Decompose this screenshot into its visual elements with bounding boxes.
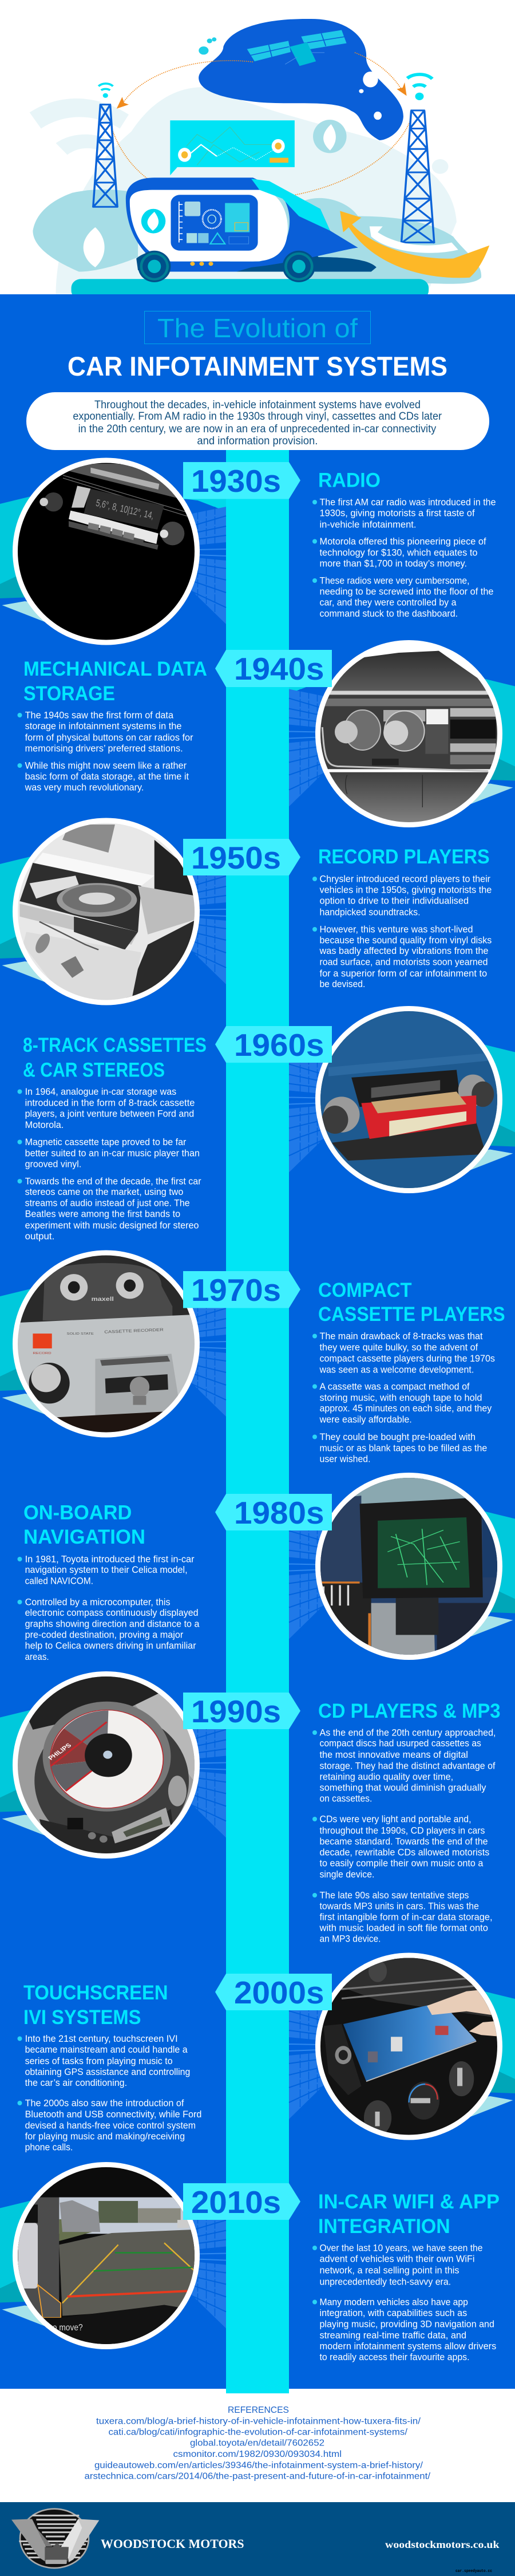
- references: guideautoweb.com/en/articles/39346/the-infotainment-system-a-brief-history/: [94, 2461, 423, 2470]
- heading: touchscreen IVI systems: [23, 1982, 168, 2029]
- year tab: 1930s: 1930s: [191, 463, 281, 499]
- text: 1970s bullets: approx. 45 minutes on each side, and they: [319, 1403, 492, 1414]
- heading: compact cassette players: [318, 1279, 505, 1326]
- heading: in-car WiFi & app integration: INTEGRATION: [318, 2215, 450, 2238]
- photo: 1970s cassette recorder: REW: [106, 1396, 118, 1401]
- intro pill: exponentially. From AM radio in the 1930s through vinyl, cassettes and CDs later: [73, 411, 442, 423]
- text: 1960s bullets: output.: [25, 1231, 54, 1241]
- text: 1950s bullets: for a superior form of car infotainment to: [319, 968, 487, 979]
- text: 1990s bullets: the most innovative means of digital: [319, 1749, 468, 1760]
- text: 1970s bullets: The main drawback of 8-tracks was that: [319, 1331, 483, 1342]
- photo: 2000s touchscreen: [315, 1952, 502, 2140]
- heading: CD players & MP3: CD PLAYERS & MP3: [318, 1700, 501, 1722]
- text: 2010s bullets: advent of vehicles with their own WiFi: [319, 2254, 475, 2264]
- heading: touchscreen IVI systems: IVI SYSTEMS: [23, 2006, 141, 2029]
- panel: 1990s CD players: [0, 1666, 501, 1944]
- heading: 8-track cassettes: 8-TRACK CASSETTES: [23, 1034, 207, 1056]
- text: radio bullets: command stuck to the dashboard.: [319, 608, 458, 619]
- text: radio bullets: needing to be screwed into the floor of the: [319, 586, 493, 597]
- year tab: 2010s: 2010s: [191, 2184, 281, 2220]
- icon: leaf left: [84, 227, 105, 267]
- text: 1980s bullets: navigation system to their Celica model,: [25, 1564, 188, 1575]
- text: 1980s bullets: Controlled by a microcomputer, this: [25, 1596, 171, 1608]
- car touchscreen: [171, 195, 258, 251]
- text: 1980s bullets: In 1981, Toyota introduced the first in-car: [25, 1554, 195, 1564]
- text: 1990s bullets: As the end of the 20th century approached,: [319, 1727, 496, 1738]
- panel: 1980s on-board navigation: [17, 1473, 515, 1660]
- photo: 1970s cassette recorder: maxell: [92, 1296, 114, 1303]
- year tab: 1960s: 1960s: [234, 1027, 324, 1063]
- heading: radio: RADIO: [318, 470, 381, 491]
- text: 1960s bullets: Magnetic cassette tape proved to be far: [25, 1137, 187, 1147]
- photo: 1970s cassette recorder: [13, 1250, 200, 1437]
- text: 1980s bullets: graphs showing direction and distance to a: [25, 1618, 200, 1630]
- photo: 1930s radio: 5,6°, 8, 10|12°, 14,: [95, 497, 155, 521]
- text: 1990s bullets: compact discs had usurped cassettes as: [319, 1738, 481, 1749]
- text: 2000s bullets: obtaining GPS assistance and controlling: [25, 2066, 190, 2077]
- brand name: WOODSTOCK MOTORS: [101, 2536, 244, 2551]
- text: 1980s bullets: areas.: [25, 1651, 49, 1662]
- panel: 1950s record players: [0, 812, 492, 1016]
- text: 2010s bullets: Many modern vehicles also have app: [319, 2297, 468, 2307]
- text: radio bullets: more than $1,700 in today’s money.: [319, 558, 467, 569]
- text: 2000s bullets: series of tasks from playing music to: [25, 2056, 173, 2066]
- panel: 2010s WiFi and app integration: [0, 2157, 500, 2362]
- references: [85, 2405, 431, 2482]
- pale background blob: [30, 87, 457, 294]
- heading: mechanical data storage: STORAGE: [23, 683, 115, 705]
- central timeline strip: [226, 441, 289, 2393]
- small watermark: car.speedyauto.cc: [455, 2569, 492, 2574]
- text: 1970s bullets: was seen as a welcome development.: [319, 1364, 474, 1375]
- text: 2010s bullets: to readily access their favourite apps.: [319, 2352, 469, 2362]
- panel: 1940s mechanical data storage: [17, 636, 515, 830]
- text: 1980s bullets: electronic compass continuously displayed: [25, 1607, 199, 1618]
- text: 1950s bullets: was badly affected by vibrations from the: [319, 945, 489, 956]
- photo: 1990s CD player: PHILIPS: [47, 1742, 73, 1761]
- text: 1940s bullets: basic form of data storage, at the time it: [25, 771, 189, 782]
- text: 1960s bullets: [17, 1086, 201, 1241]
- light teal blobs: [33, 190, 481, 284]
- text: 1970s bullets: they were quite bulky, so the advent of: [319, 1342, 478, 1352]
- text: 1990s bullets: first intangible form of in-car data storage,: [319, 1911, 492, 1923]
- text: 1970s bullets: They could be bought pre-loaded with: [319, 1431, 476, 1442]
- text: 1990s bullets: an MP3 device.: [319, 1933, 381, 1944]
- text: 1960s bullets: players, a joint venture between Ford and: [25, 1108, 194, 1119]
- car leaf badge: [141, 209, 165, 234]
- intro pill: in the 20th century, we are now in an era of unprecedented in-car connectivity: [78, 423, 437, 435]
- text: 1970s bullets: user wished.: [319, 1453, 371, 1465]
- photo: 1950s record player: [13, 818, 200, 1005]
- text: 1970s bullets: [312, 1331, 495, 1465]
- year tab: 2000s: 2000s: [234, 1975, 324, 2010]
- text: 2010s bullets: Over the last 10 years, we have seen the: [319, 2242, 483, 2254]
- text: radio bullets: car, and they were controlled by a: [319, 597, 457, 608]
- heading: on-board navigation: [23, 1502, 145, 1548]
- text: 1960s bullets: Motorola.: [25, 1119, 64, 1130]
- year tab: 1980s: 1980s: [234, 1495, 324, 1530]
- text: 2000s bullets: for playing music and making/receiving: [25, 2131, 185, 2141]
- text: 2000s bullets: [17, 2033, 201, 2153]
- text: 1990s bullets: decade, rewritable CDs allowed motorists: [319, 1847, 489, 1857]
- year tab: 1940s: 1940s: [234, 651, 324, 687]
- text: 1990s bullets: throughout the 1990s, CD players in cars: [319, 1825, 485, 1836]
- photo: 1980s navigation screen: [315, 1473, 502, 1660]
- panel: 1960s 8-track: [17, 1003, 515, 1241]
- text: 1950s bullets: Chrysler introduced record players to their: [319, 874, 490, 884]
- text: 1960s bullets: Beatles were among the first bands to: [25, 1208, 180, 1220]
- photo: 1970s cassette recorder: PLAY: [130, 1408, 144, 1413]
- text: 1960s bullets: stereos came on the market, using two: [25, 1186, 183, 1197]
- text: 2000s bullets: phone calls.: [25, 2141, 73, 2153]
- icon: satellite: [247, 30, 347, 66]
- text: 1950s bullets: [312, 874, 492, 989]
- heading: compact cassette players: COMPACT: [318, 1279, 412, 1301]
- photo: 2010s parking camera: [13, 2162, 200, 2349]
- text: 1960s bullets: In 1964, analogue in-car storage was: [25, 1086, 176, 1097]
- text: 2000s bullets: the car’s air conditioning.: [25, 2077, 127, 2088]
- text: 1960s bullets: streams of audio instead of just one. The: [25, 1198, 190, 1208]
- chart speech bubble: [170, 120, 295, 175]
- text: 1990s bullets: something that would diminish gradually: [319, 1782, 486, 1793]
- tower left: [93, 84, 118, 207]
- tower right: [401, 74, 435, 243]
- photo: 1970s cassette recorder: CASSETTE RECORDER: [104, 1327, 164, 1334]
- text: 1970s bullets: music or as blank tapes to be filled as the: [319, 1443, 487, 1453]
- text: 2000s bullets: Into the 21st century, touchscreen IVI: [25, 2033, 178, 2044]
- heading: 8-track cassettes: [23, 1034, 207, 1081]
- hero illustration: connected car: [30, 19, 489, 299]
- heading: mechanical data storage: [23, 658, 207, 705]
- text: 1970s bullets: storing music, with enough tape to hold: [319, 1392, 482, 1403]
- text: 1990s bullets: [312, 1727, 496, 1944]
- text: 1970s bullets: were easily affordable.: [319, 1414, 412, 1425]
- intro pill: and information provision.: [197, 435, 318, 447]
- text: 2010s bullets: network, a real selling point in this: [319, 2265, 459, 2275]
- text: 1980s bullets: called NAVICOM.: [25, 1576, 93, 1586]
- text: 1950s bullets: option to drive to their individualised: [319, 896, 469, 906]
- text: 2010s bullets: streaming real-time traffic data, and: [319, 2330, 466, 2341]
- text: 1940s bullets: was very much revolutionary.: [25, 782, 144, 792]
- text: radio bullets: The first AM car radio was introduced in the: [319, 497, 496, 507]
- icon: leaf badge: [313, 120, 347, 153]
- text: 1960s bullets: Towards the end of the decade, the first car: [25, 1176, 201, 1186]
- text: 1960s bullets: better suited to an in-car music player than: [25, 1147, 200, 1159]
- text: 1940s bullets: While this might now seem like a rather: [25, 760, 187, 771]
- text: 1960s bullets: grooved vinyl.: [25, 1159, 81, 1169]
- text: 1990s bullets: retaining audio quality over time,: [319, 1772, 453, 1782]
- references: csmonitor.com/1982/0930/093034.html: [173, 2449, 342, 2459]
- title: CAR INFOTAINMENT SYSTEMS: [68, 351, 447, 381]
- references: REFERENCES: [228, 2405, 289, 2415]
- text: 1950s bullets: vehicles in the 1950s, giving motorists the: [319, 884, 492, 896]
- photo: 1970s cassette recorder: FWD: [156, 1392, 168, 1397]
- text: 1940s bullets: The 1940s saw the first form of data: [25, 710, 174, 720]
- text: 1990s bullets: single device.: [319, 1869, 374, 1880]
- text: 1990s bullets: on cassettes.: [319, 1793, 372, 1804]
- text: 1990s bullets: to easily compile their own music onto a: [319, 1857, 484, 1869]
- year tab: 1950s: 1950s: [191, 840, 281, 875]
- intro pill: Throughout the decades, in-vehicle infotainment systems have evolved: [94, 399, 421, 411]
- references: arstechnica.com/cars/2014/06/the-past-present-and-future-of-in-car-infotainment/: [85, 2471, 431, 2482]
- road: [72, 279, 429, 299]
- heading: mechanical data storage: MECHANICAL DATA: [23, 658, 207, 680]
- heading: on-board navigation: ON-BOARD: [23, 1502, 132, 1524]
- intro pill: [26, 392, 489, 450]
- car: [126, 177, 377, 282]
- references: cati.ca/blog/cati/infographic-the-evolution-of-car-infotainment-systems/: [109, 2428, 408, 2437]
- text: 1970s bullets: compact cassette players during the 1970s: [319, 1353, 495, 1364]
- references: global.toyota/en/detail/7602652: [190, 2438, 324, 2448]
- yellow motion arrow: [340, 211, 489, 278]
- text: 1990s bullets: towards MP3 units in cars. This was the: [319, 1901, 479, 1911]
- text: radio bullets: 1930s, giving motorists a first taste of: [319, 507, 475, 519]
- heading: 8-track cassettes: & CAR STEREOS: [23, 1059, 165, 1081]
- text: 1980s bullets: [17, 1554, 200, 1662]
- text: 2010s bullets: integration, with capabilities such as: [319, 2307, 467, 2318]
- footer band: [0, 2502, 515, 2576]
- photo: 1990s CD player: [13, 1671, 200, 1859]
- photo: 1960s 8-track player: [315, 1006, 502, 1193]
- photo: 1940s chrome radio: [315, 640, 502, 827]
- photo: 1970s cassette recorder: RECORD: [33, 1351, 52, 1355]
- heading: in-car WiFi & app integration: IN-CAR WIFI & APP: [318, 2191, 500, 2213]
- text: radio bullets: technology for $130, which equates to: [319, 547, 477, 558]
- photo: 1970s cassette recorder: STOP: [126, 1368, 141, 1372]
- logo: Woodstock Motors emblem: [11, 2509, 99, 2568]
- panel: 2000s touchscreen IVI: [17, 1931, 515, 2153]
- text: radio bullets: Motorola offered this pioneering piece of: [319, 536, 486, 547]
- photo: 1970s cassette recorder: SOLID STATE: [67, 1332, 94, 1336]
- text: 1950s bullets: However, this venture was short-lived: [319, 924, 473, 934]
- text: radio bullets: These radios were very cumbersome,: [319, 575, 469, 586]
- year tab: 1970s: 1970s: [191, 1272, 281, 1308]
- text: 1990s bullets: with music loaded in soft file format onto: [319, 1923, 488, 1933]
- panel: 1970s compact cassette: [0, 1245, 505, 1465]
- text: 1980s bullets: help to Celica owners driving in unfamiliar: [25, 1640, 196, 1651]
- photo: 2010s parking camera: o move?: [53, 2323, 83, 2333]
- text: 1990s bullets: The late 90s also saw tentative steps: [319, 1889, 469, 1901]
- text: 1990s bullets: storage. They had the distinct advantage of: [319, 1760, 496, 1772]
- white motion arrow: [370, 226, 458, 253]
- heading: in-car WiFi & app integration: [318, 2191, 500, 2238]
- text: 1960s bullets: introduced in the form of 8-track cassette: [25, 1097, 195, 1108]
- text: 1950s bullets: road surface, and motorists soon yearned: [319, 956, 488, 968]
- orange dotted signal arcs: [110, 53, 411, 204]
- text: 2010s bullets: modern infotainment systems allow drivers: [319, 2341, 496, 2352]
- wheels: [138, 251, 315, 282]
- heading: touchscreen IVI systems: TOUCHSCREEN: [23, 1982, 168, 2004]
- text: radio bullets: [312, 497, 496, 619]
- website: woodstockmotors.co.uk: [385, 2539, 499, 2550]
- text: 2010s bullets: [312, 2242, 496, 2362]
- text: 1950s bullets: because the sound quality from vinyl disks: [319, 934, 492, 946]
- text: 1950s bullets: handpicked soundtracks.: [319, 907, 420, 917]
- text: 1940s bullets: storage in infotainment systems in the: [25, 720, 181, 732]
- text: 2000s bullets: became mainstream and could handle a: [25, 2044, 188, 2055]
- heading: on-board navigation: NAVIGATION: [23, 1526, 145, 1548]
- satellite cloud: [199, 19, 403, 140]
- year tab: 1990s: 1990s: [191, 1694, 281, 1729]
- text: 1980s bullets: pre-coded destination, proving a major: [25, 1630, 184, 1640]
- text: 1940s bullets: form of physical buttons on car radios for: [25, 732, 193, 743]
- text: 1960s bullets: experiment with music designed for stereo: [25, 1220, 199, 1231]
- text: 1990s bullets: CDs were very light and portable and,: [319, 1814, 472, 1824]
- text: 1970s bullets: A cassette was a compact method of: [319, 1381, 470, 1392]
- panel: 1930s radio: [0, 458, 496, 649]
- text: radio bullets: in-vehicle infotainment.: [319, 519, 417, 530]
- text: 2000s bullets: The 2000s also saw the introduction of: [25, 2098, 184, 2108]
- text: 1990s bullets: became standard. Towards the end of the: [319, 1836, 488, 1847]
- text: 1940s bullets: [17, 710, 193, 792]
- text: 2000s bullets: Bluetooth and USB connectivity, while Ford: [25, 2109, 201, 2120]
- heading: record players: RECORD PLAYERS: [318, 846, 490, 868]
- title box: The Evolution of: The Evolution of: [157, 313, 358, 343]
- text: 2010s bullets: unprecedentedly tech-savvy era.: [319, 2277, 451, 2287]
- text: 2010s bullets: playing music, providing 3D navigation and: [319, 2319, 494, 2329]
- photo: 1930s radio: [13, 458, 200, 645]
- text: 1950s bullets: be devised.: [319, 979, 365, 989]
- text: 1940s bullets: memorising drivers’ preferred stations.: [25, 743, 183, 754]
- text: 2000s bullets: devised a hands-free voice control system: [25, 2120, 196, 2131]
- references: tuxera.com/blog/a-brief-history-of-in-vehicle-infotainment-how-tuxera-fits-in/: [96, 2416, 421, 2427]
